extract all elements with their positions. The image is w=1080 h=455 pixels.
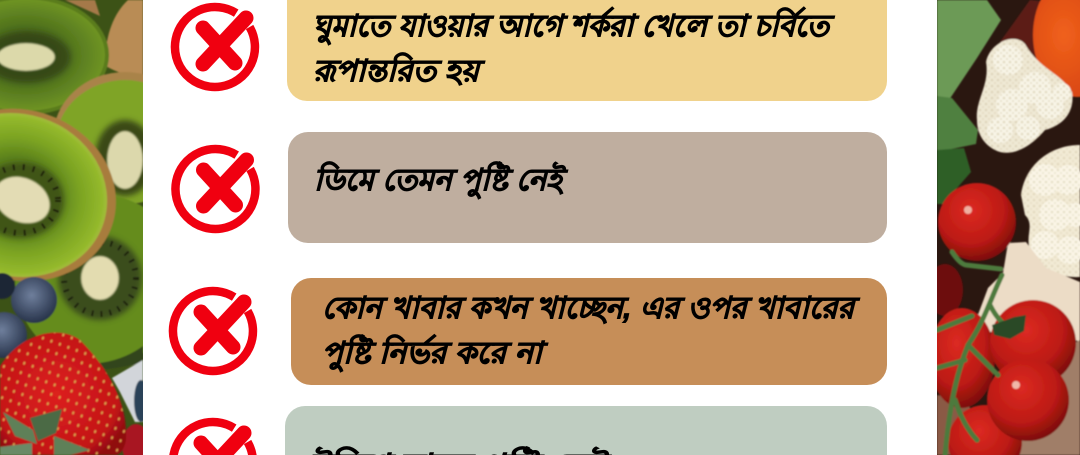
background surface [112,360,143,422]
cauliflower floret [977,39,1073,153]
cream cloth [973,242,1080,342]
panel: sugar before sleep [287,0,887,101]
lettuce [937,0,1001,204]
tomatoes [927,183,1076,455]
lower kiwi slice [14,197,143,370]
photo: tomatoes, cauliflower and lettuce [927,0,1080,455]
strawberries [0,333,150,455]
second kiwi slice [56,72,143,204]
burlap cloth [1018,340,1080,455]
text: timing myth line one: কোন খাবার কখন খাচ্ছেন, এর ওপর খাবারের [322,292,860,325]
top kiwi slice [0,0,109,115]
cauliflower head [1021,145,1080,277]
blueberries [0,273,148,422]
icon: red cross four, cropped [173,422,253,455]
icon: red cross three [173,291,253,371]
panel: food timing [291,278,887,385]
panel: fourth myth, cropped [285,406,887,455]
icon: red cross two [175,149,255,229]
icon: red cross one [175,7,255,87]
big kiwi slice [0,108,117,282]
red stem backdrop [1000,0,1041,59]
strawberry leaves [0,409,90,455]
text: sugar myth line two: রূপান্তরিত হয় [313,52,486,88]
text: sugar myth line one: ঘুমাতে যাওয়ার আগে শর্করা খেলে তা চর্বিতে [313,6,835,46]
photo: kiwi, blueberries and strawberry [0,0,143,455]
vine stems [937,252,1014,455]
tomato calyx [992,315,1026,339]
text: eggs myth: ডিমে তেমন পুষ্টি নেই [314,161,568,200]
orange tomato [1033,0,1080,97]
brown kiwi skin [106,0,143,75]
panel: eggs [288,132,887,243]
text: timing myth line two: পুষ্টি নির্ভর করে না [322,333,548,373]
